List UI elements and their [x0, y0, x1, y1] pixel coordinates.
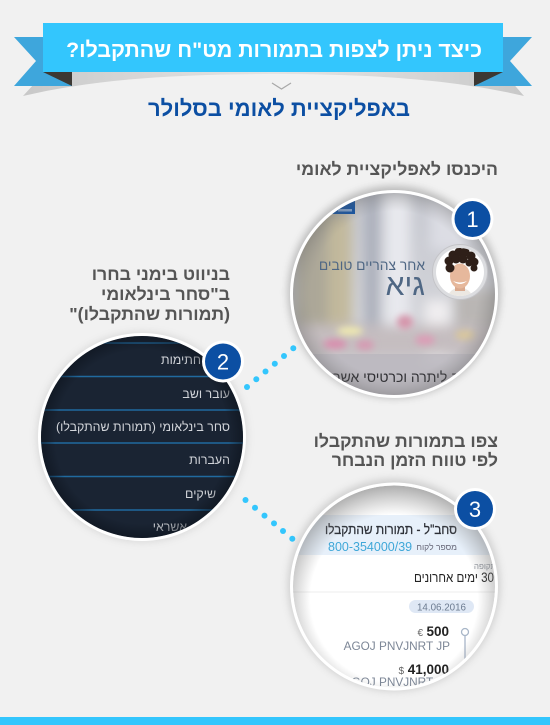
menu dividers	[38, 343, 246, 510]
banner ribbon	[14, 23, 532, 96]
date pill	[409, 600, 474, 614]
heading: step 3: לפי טווח הזמן הנבחר	[332, 450, 498, 470]
ribbon left tail	[14, 37, 72, 86]
icon: user avatar	[432, 244, 488, 300]
menu item: checking: עובר ושב	[182, 387, 230, 401]
menu item: credit: אשראי	[153, 520, 187, 534]
ribbon right tail	[474, 37, 532, 86]
heading: step 2: (תמורות שהתקבלו)"	[69, 304, 230, 324]
amount 500 euro: €	[417, 628, 423, 639]
amount 41,000 dollar: $	[398, 666, 404, 677]
heading: step 3: צפו בתמורות שהתקבלו	[314, 431, 498, 451]
dotted connector: step 2 to 3	[242, 497, 295, 542]
panel: circle 2 navigation menu	[37, 332, 247, 542]
balance strip text: ה ליתרה וכרטיסי אשראי	[321, 369, 460, 385]
badge 2	[202, 340, 244, 382]
footer bar	[0, 717, 550, 725]
badge 1	[452, 198, 494, 240]
name: גיא	[386, 269, 425, 302]
badge 2: 2	[217, 350, 229, 374]
amount 500 euro	[344, 626, 450, 650]
heading: step 1: היכנסו לאפליקציית לאומי	[296, 159, 498, 179]
ribbon body	[43, 23, 503, 72]
amount 500 euro: AGOJ PNVJNRT JP	[344, 639, 450, 653]
menu item: cheques: שיקים	[185, 487, 216, 501]
lower strip	[313, 354, 475, 395]
icon: chevron	[272, 83, 291, 89]
ribbon left fold	[43, 72, 72, 86]
heading: step 2: בניווט בימני בחרו	[92, 264, 230, 284]
greeting text: אחר צהריים טובים	[319, 258, 425, 273]
subtitle: באפליקציית לאומי בסלולר	[148, 96, 410, 121]
amount 41,000 dollar	[353, 664, 448, 686]
panel: circle 1 app greeting	[288, 186, 505, 398]
badge 3: 3	[469, 497, 481, 522]
heading: step 2: ב"סחר בינלאומי	[101, 284, 230, 304]
ribbon right fold	[474, 72, 503, 86]
account strip	[290, 515, 498, 555]
period value: 30 ימים אחרונים	[414, 570, 494, 585]
menu item: expirations: חתימות	[161, 353, 201, 367]
ribbon shadow	[23, 72, 524, 96]
amount 500 euro: 500	[426, 624, 449, 639]
blurred city photo	[290, 190, 505, 398]
account number: 800-354000/39	[328, 540, 412, 554]
logo corner	[332, 200, 355, 214]
dotted connector: step 1 to 2	[244, 345, 296, 390]
amount 41,000 dollar: AGOJ PNVJNRT JP	[344, 675, 450, 689]
heading: step 3	[314, 431, 498, 470]
date pill: 14.06.2016	[417, 602, 467, 614]
period label: תקופה	[474, 562, 496, 571]
title: כיצד ניתן לצפות בתמורות מט"ח שהתקבלו?	[66, 38, 482, 62]
timeline	[462, 628, 468, 665]
account title: סחב"ל - תמורות שהתקבלו	[325, 522, 457, 537]
menu item: international trade: סחר בינלאומי (תמורות שהתקבלו)	[56, 420, 230, 434]
panel: circle 3 received proceeds	[288, 479, 500, 691]
heading: step 2	[69, 264, 230, 324]
badge 1: 1	[466, 207, 479, 232]
account label: מספר לקוח	[416, 542, 457, 552]
badge 3	[454, 488, 496, 530]
amount 41,000 dollar: 41,000	[408, 662, 449, 677]
menu item: transfers: העברות	[189, 453, 230, 467]
